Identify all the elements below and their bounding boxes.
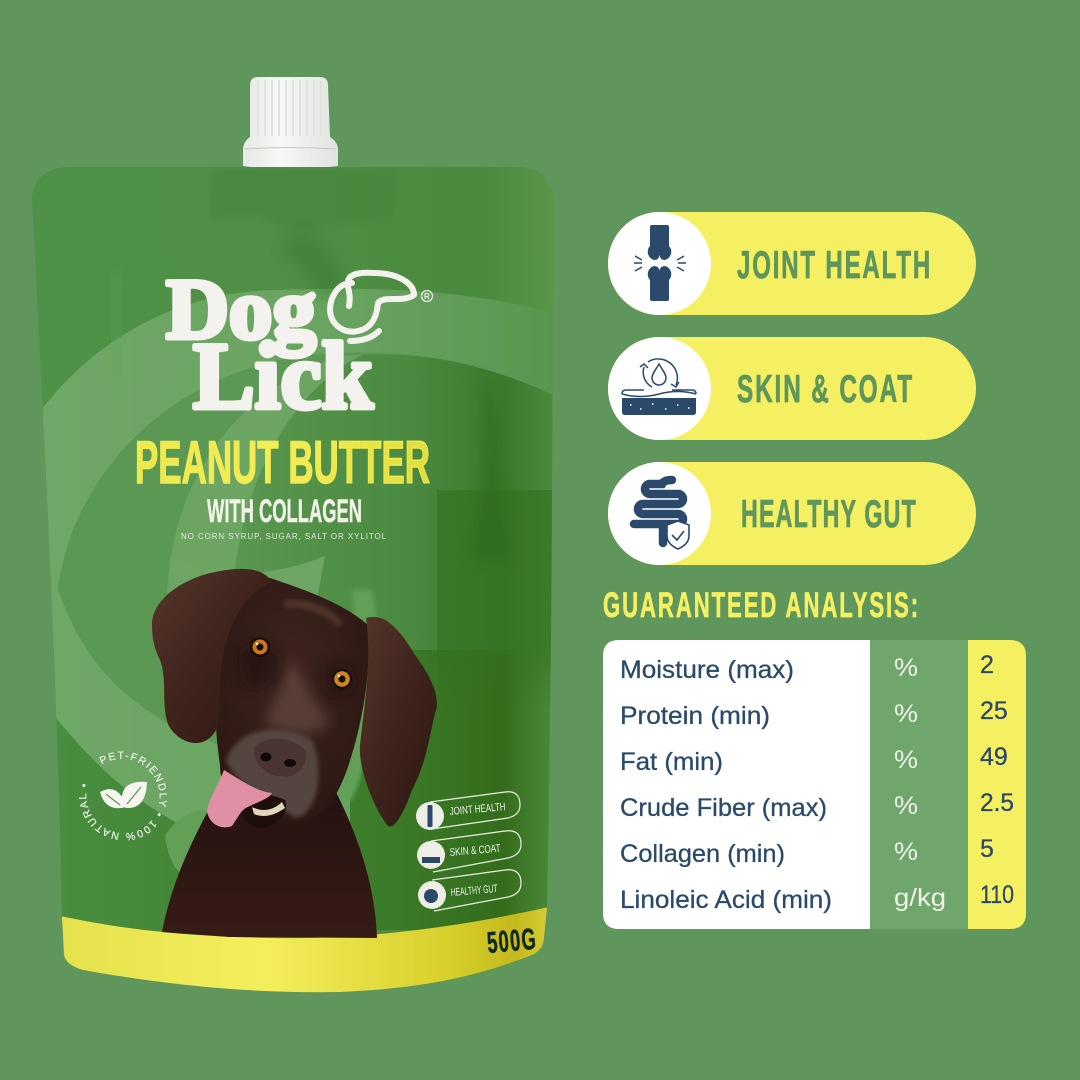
icon: intestines with shield [634, 480, 689, 549]
yellow bottom band [62, 907, 547, 992]
icon: licking tongue [330, 273, 414, 341]
table units: % [894, 838, 918, 866]
badge: pet-friendly round stamp: PET-FRIENDLY • 100% NATURAL • [79, 752, 168, 840]
table units [894, 654, 946, 912]
dog head [215, 578, 369, 823]
table values: 2 [980, 651, 994, 679]
label: joint health: JOINT HEALTH [737, 244, 932, 287]
text: no corn syrup line: NO CORN SYRUP, SUGAR, SALT OR XYLITOL [181, 531, 387, 541]
dog left ear [152, 569, 272, 743]
icon: skin with water drop [622, 359, 696, 415]
table units: % [894, 654, 918, 682]
mini badge: joint health: JOINT HEALTH [449, 801, 506, 818]
subheading: With Collagen: WITH COLLAGEN [207, 493, 362, 529]
table values: 25 [980, 697, 1008, 725]
dog nose [254, 739, 306, 777]
icon: white pouch cap [243, 77, 338, 169]
dog tongue [207, 770, 272, 827]
registered mark [422, 290, 432, 302]
mini badge: healthy gut: HEALTHY GUT [450, 883, 498, 899]
table values [980, 651, 1014, 909]
table row labels: Crude Fiber (max) [620, 794, 827, 822]
table units: % [894, 700, 918, 728]
table row labels: Protein (min) [620, 702, 770, 730]
dog chest [162, 790, 377, 938]
dog facial highlights [226, 604, 358, 818]
dog mouth [241, 795, 286, 828]
dog right eye [332, 669, 352, 689]
pill: joint health [608, 212, 976, 315]
table: guaranteed analysis [603, 640, 1026, 929]
table row labels: Fat (min) [620, 748, 723, 776]
table values: 2.5 [980, 789, 1014, 817]
label: skin and coat: SKIN & COAT [737, 368, 914, 411]
panel: product pouch [30, 165, 555, 1000]
icon: joint [634, 225, 686, 301]
pouch swirl pattern [34, 289, 553, 880]
dog right ear [360, 617, 437, 827]
dog left eye [250, 637, 270, 657]
table row labels: Moisture (max) [620, 656, 794, 684]
pill: healthy gut [608, 462, 976, 565]
table values: 49 [980, 743, 1008, 771]
logo: Dog Lick: Dog [166, 261, 316, 357]
registered mark: R [424, 292, 430, 301]
pouch creases [113, 170, 510, 560]
logo: Dog Lick [166, 261, 432, 429]
pill: skin and coat [608, 337, 976, 440]
illustration: brown dog [152, 569, 437, 938]
icon: two leaves [100, 782, 147, 808]
table row labels [620, 656, 832, 914]
label: healthy gut: HEALTHY GUT [741, 493, 917, 536]
table values: 110 [980, 881, 1014, 909]
table values: 5 [980, 835, 994, 863]
mini badge: skin and coat: SKIN & COAT [449, 843, 501, 859]
pouch mini badges [416, 792, 521, 911]
table units: g/kg [894, 884, 946, 912]
heading: Peanut Butter: PEANUT BUTTER [135, 429, 430, 496]
table column backgrounds [603, 640, 1026, 929]
text: 500G weight: 500G [486, 923, 538, 960]
table units: % [894, 746, 918, 774]
table row labels: Collagen (min) [620, 840, 785, 868]
table units: % [894, 792, 918, 820]
table row labels: Linoleic Acid (min) [620, 886, 832, 914]
logo: Dog Lick: Lick [193, 323, 373, 429]
